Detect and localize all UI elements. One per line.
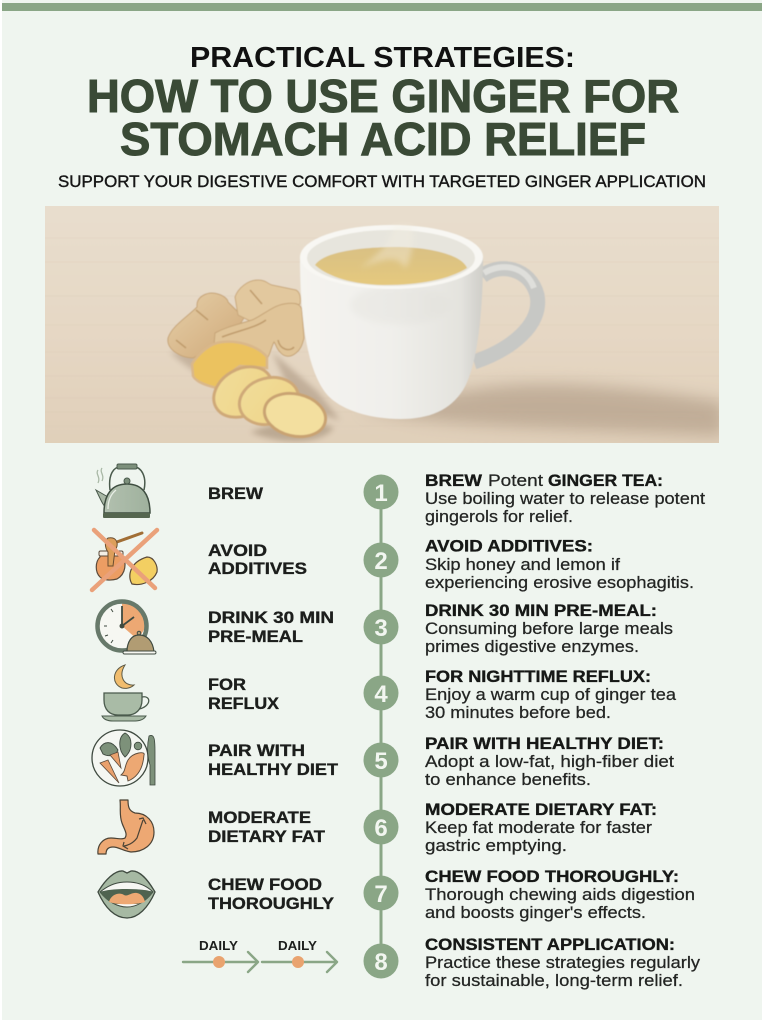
step text: PAIR WITH HEALTHY DIET:: [425, 735, 664, 753]
label: PRE-MEAL: [208, 628, 303, 646]
step 8: [183, 936, 701, 990]
step 4: [102, 665, 677, 722]
label: CHEW FOOD: [208, 876, 322, 894]
title: PRACTICAL STRATEGIES:: [190, 42, 575, 74]
mug shadow: [360, 384, 724, 436]
step text: [425, 868, 695, 922]
title: [87, 42, 679, 165]
step text: experiencing erosive esophagitis.: [425, 573, 694, 592]
step text: primes digestive enzymes.: [425, 637, 639, 656]
label: [208, 809, 325, 846]
step text: to enhance benefits.: [425, 770, 591, 789]
step 6: [98, 800, 657, 855]
icon: daily arrows: DAILY: [199, 938, 238, 953]
icon: mouth: [98, 871, 155, 918]
step number: 1: [374, 480, 388, 507]
step number: 5: [374, 748, 388, 775]
step text: Potent: [488, 471, 543, 490]
step 7: [98, 868, 695, 922]
label: PAIR WITH: [208, 742, 305, 760]
step text: for sustainable, long-term relief.: [425, 971, 683, 990]
step text: [425, 936, 701, 990]
label: THOROUGHLY: [208, 895, 334, 913]
step text: and boosts ginger's effects.: [425, 903, 646, 922]
cut face: [192, 342, 267, 388]
middle lobe: [214, 303, 304, 357]
step number: 2: [374, 548, 388, 575]
timeline connector: [380, 492, 382, 961]
step text: Enjoy a warm cup of ginger tea: [425, 685, 677, 704]
step text: Skip honey and lemon if: [425, 555, 620, 574]
step text: gastric emptying.: [425, 836, 567, 855]
step number: 6: [374, 815, 388, 842]
step text: 30 minutes before bed.: [425, 703, 611, 722]
step number: [364, 810, 398, 844]
step number: [364, 610, 398, 644]
step text: Keep fat moderate for faster: [425, 818, 652, 837]
step number: [364, 944, 398, 978]
label: REFLUX: [208, 695, 279, 713]
steam: [364, 246, 414, 268]
photo: mug of ginger tea with ginger root: [40, 200, 724, 448]
title: STOMACH ACID RELIEF: [120, 113, 646, 165]
step number: [364, 474, 398, 510]
mug handle: [474, 269, 538, 362]
step text: [425, 602, 673, 656]
step number: [364, 542, 398, 578]
label: DRINK 30 MIN: [208, 609, 334, 627]
step text: GINGER TEA:: [548, 472, 663, 490]
step text: CONSISTENT APPLICATION:: [425, 936, 675, 954]
subtitle: SUPPORT YOUR DIGESTIVE COMFORT WITH TARGETED GINGER APPLICATION: [58, 173, 706, 191]
step number: [364, 876, 398, 910]
step text: gingerols for relief.: [425, 507, 573, 526]
step text: AVOID ADDITIVES:: [425, 538, 593, 556]
icon: kettle: [96, 464, 150, 518]
icon: moon and tea cup: [102, 665, 149, 721]
step text: [425, 735, 674, 789]
step number: [364, 742, 398, 778]
step number: 4: [374, 681, 388, 708]
step text: [425, 471, 705, 526]
top accent bar: [2, 3, 762, 11]
icon: clock and meal cloche: [98, 602, 156, 654]
step 3: [98, 602, 673, 656]
step text: DRINK 30 MIN PRE-MEAL:: [425, 602, 657, 620]
label: [208, 676, 279, 713]
title: HOW TO USE GINGER FOR: [87, 70, 679, 122]
label: DIETARY FAT: [208, 828, 325, 846]
step 2: [92, 530, 694, 592]
ginger slices: [212, 366, 272, 420]
mug body: [300, 256, 483, 419]
step text: Use boiling water to release potent: [425, 489, 705, 508]
step text: Practice these strategies regularly: [425, 953, 701, 972]
step text: Thorough chewing aids digestion: [425, 885, 695, 904]
label: FOR: [208, 676, 246, 694]
label: [208, 609, 334, 646]
step text: Consuming before large meals: [425, 619, 673, 638]
step text: [425, 801, 657, 855]
label: BREW: [208, 485, 263, 503]
label: MODERATE: [208, 809, 311, 827]
icon: daily arrows: [183, 938, 337, 972]
step text: Adopt a low-fat, high-fiber diet: [425, 752, 674, 771]
label: ADDITIVES: [208, 560, 307, 578]
icon: daily arrows: DAILY: [278, 938, 317, 953]
step text: [425, 668, 677, 722]
top lobe: [235, 280, 300, 322]
step number: 8: [374, 949, 388, 976]
step number: 3: [374, 615, 388, 642]
step 1: [96, 464, 705, 526]
left lobe: [168, 293, 244, 358]
label: [208, 742, 338, 779]
step number: [364, 676, 398, 710]
step text: BREW: [425, 472, 482, 490]
step text: FOR NIGHTTIME REFLUX:: [425, 668, 651, 686]
step text: CHEW FOOD THOROUGHLY:: [425, 868, 679, 886]
step 5: [92, 730, 674, 789]
icon: stomach: [98, 800, 154, 854]
tea surface: [315, 247, 467, 285]
icon: no honey or lemon: [92, 530, 157, 590]
label: [208, 876, 334, 913]
step number: 7: [374, 881, 388, 908]
step text: MODERATE DIETARY FAT:: [425, 801, 657, 819]
ginger root: [168, 280, 330, 442]
label: HEALTHY DIET: [208, 761, 338, 779]
step text: [425, 538, 694, 592]
label: AVOID: [208, 542, 267, 560]
icon: healthy plate: [92, 730, 155, 786]
label: [208, 542, 307, 578]
